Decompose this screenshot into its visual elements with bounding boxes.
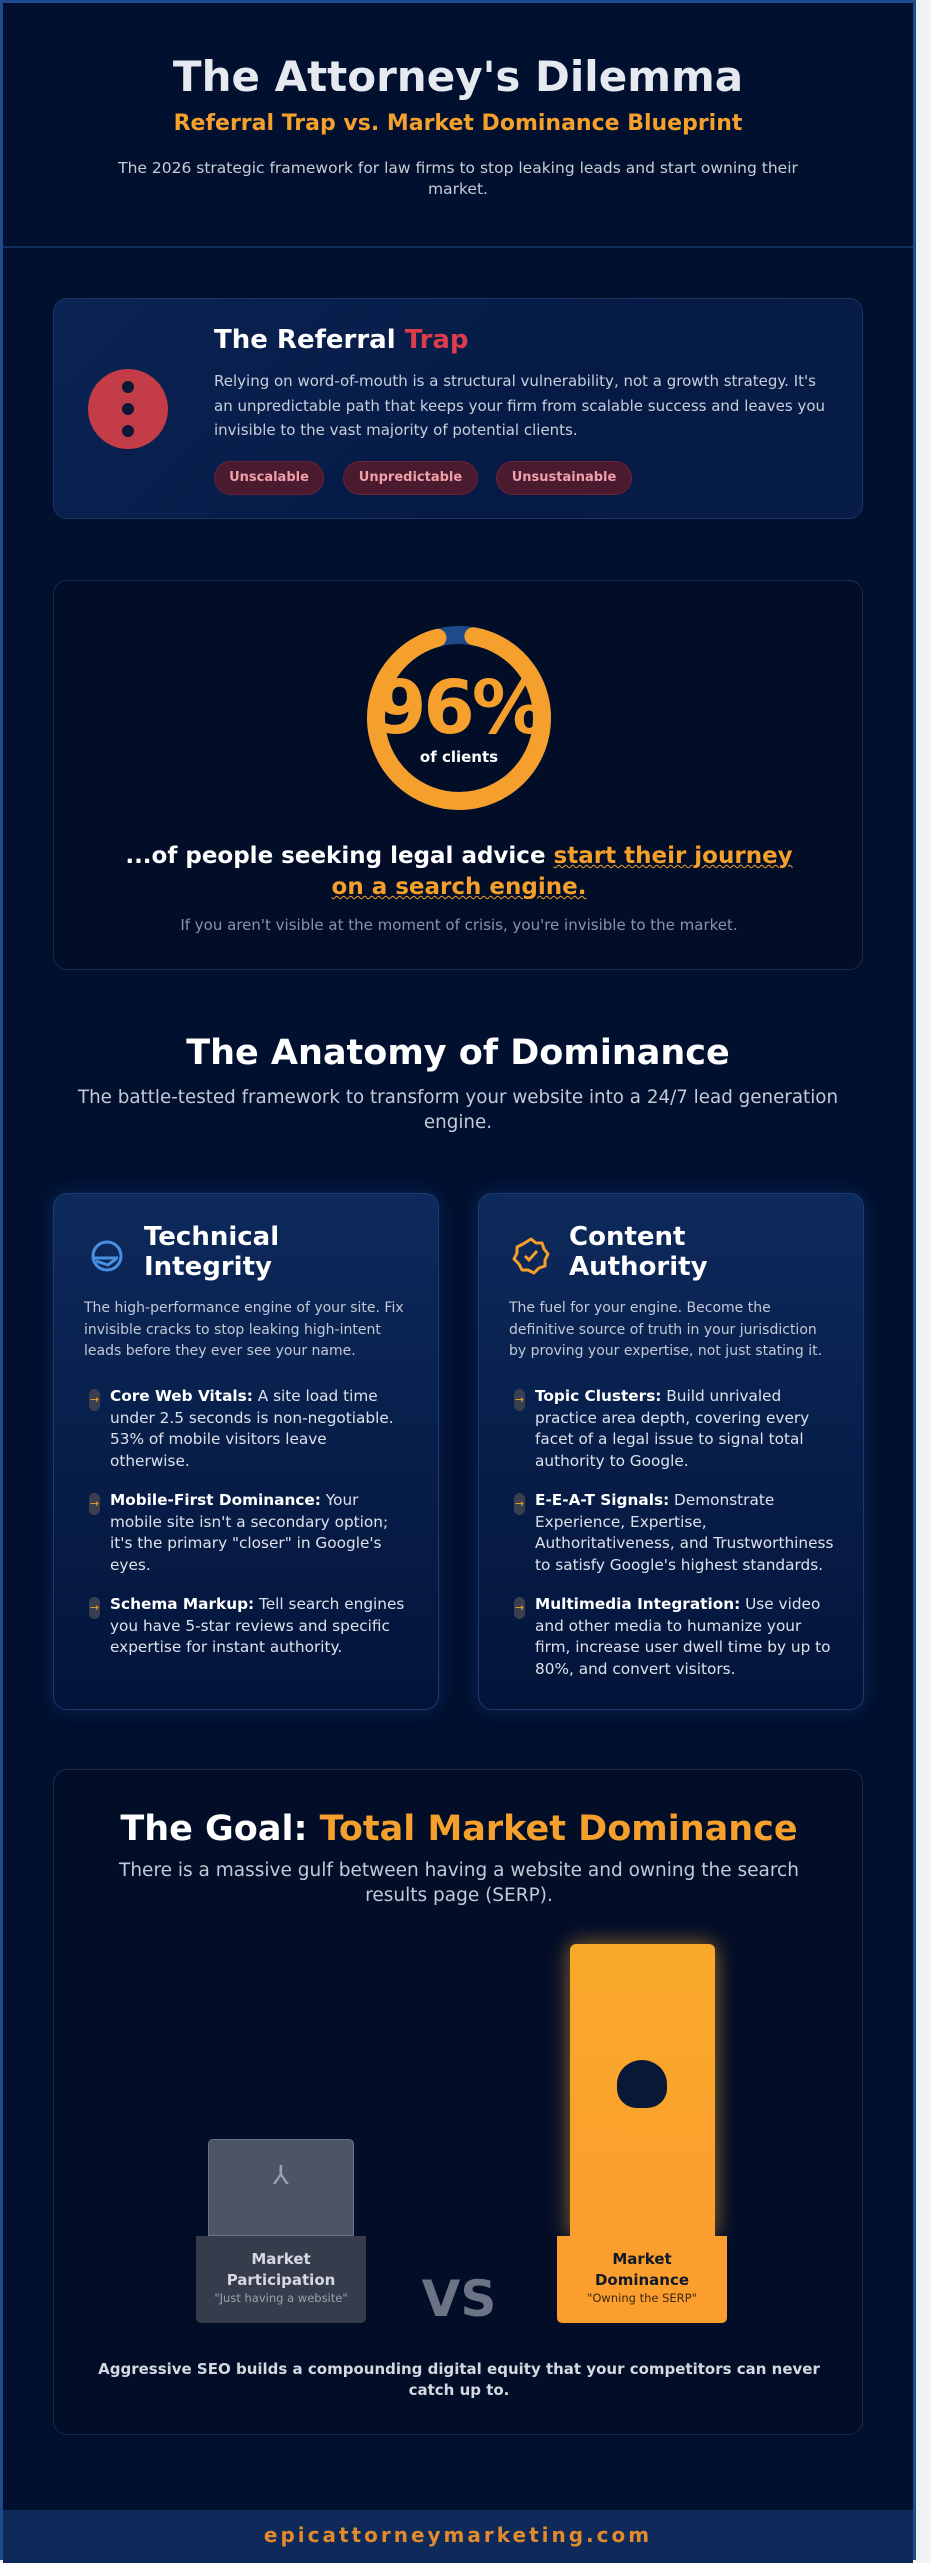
bar: market participation: Market: [251, 2250, 311, 2268]
icon: fork: ⅄: [273, 2161, 289, 2191]
description: The high-performance engine of your site. Fix invisible cracks to stop leaking high-intent leads before they ever see your name.: [84, 1300, 404, 1359]
panel: referral trap: [53, 298, 863, 519]
title: The Attorney's Dilemma: [173, 52, 743, 101]
statement: ...of people seeking legal advice start their journey on a search engine.: [125, 843, 793, 900]
panel: content authority: →: [515, 1497, 524, 1510]
bar: market participation: "Just having a website": [214, 2291, 348, 2305]
heading: The Goal: Total Market Dominance: [120, 1809, 798, 1849]
icon: badge check: [512, 1238, 550, 1274]
anatomy heading: The battle-tested framework to transform your website into a 24/7 lead generation engine.: [78, 1087, 838, 1133]
tags: Unscalable: [229, 470, 309, 485]
heading: Authority: [569, 1252, 708, 1282]
bullet: core web vitals: Core Web Vitals: A site load time under 2.5 seconds is non-negotiable. 53% of mobile visitors leave otherwise.: [110, 1387, 394, 1470]
panel: content authority: →: [515, 1601, 524, 1614]
panel: 96% stat: [53, 580, 863, 970]
panel: technical integrity: [53, 1193, 439, 1710]
anatomy heading: [78, 1033, 838, 1133]
heading: [144, 1222, 279, 1282]
bar: market dominance: Market: [612, 2250, 672, 2268]
bar: market participation: [196, 2139, 366, 2323]
description: The fuel for your engine. Become the definitive source of truth in your jurisdiction by proving your expertise, not just stating it.: [509, 1300, 822, 1359]
takeaway: Aggressive SEO builds a compounding digital equity that your competitors can never catch up to.: [98, 2360, 820, 2399]
tags: [214, 461, 632, 495]
vs label: VS: [422, 2270, 496, 2328]
subtitle: Referral Trap vs. Market Dominance Blueprint: [174, 111, 742, 136]
bar: market dominance: "Owning the SERP": [587, 2291, 697, 2305]
header: [3, 3, 913, 248]
tags: Unsustainable: [512, 470, 616, 485]
bullet: multimedia: Multimedia Integration: Use video and other media to humanize your firm, increase user dwell time by up to 80%, and convert visitors.: [535, 1595, 831, 1678]
anatomy heading: The Anatomy of Dominance: [186, 1033, 730, 1073]
footer: [3, 2510, 913, 2563]
subtext: There is a massive gulf between having a website and owning the search results page (SERP).: [119, 1860, 799, 1906]
note: If you aren't visible at the moment of crisis, you're invisible to the market.: [180, 916, 738, 934]
panel: content authority: →: [515, 1393, 524, 1406]
bullet: schema: Schema Markup: Tell search engines you have 5-star reviews and specific expertise for instant authority.: [110, 1595, 404, 1656]
bullet: EEAT: E-E-A-T Signals: Demonstrate Experience, Expertise, Authoritativeness, and Trustworthiness to satisfy Google's highest standards.: [535, 1491, 833, 1574]
donut chart: [367, 626, 551, 810]
heading: Content: [569, 1222, 685, 1252]
heading: The Referral Trap: [214, 325, 469, 355]
donut chart: 96%: [375, 665, 544, 751]
bar: market participation: Participation: [227, 2271, 335, 2289]
panel: technical integrity: →: [90, 1497, 99, 1510]
panel: content authority: [478, 1193, 864, 1710]
heading: [569, 1222, 708, 1282]
heading: Technical: [144, 1222, 279, 1252]
panel: technical integrity: →: [90, 1393, 99, 1406]
bar: market dominance: Dominance: [595, 2271, 689, 2289]
donut chart: of clients: [420, 748, 498, 766]
icon: gauge: [92, 1240, 122, 1272]
panel: goal: [53, 1769, 863, 2435]
footer: epicattorneymarketing.com: [264, 2523, 652, 2547]
intro text: The 2026 strategic framework for law firms to stop leaking leads and start owning their market.: [118, 159, 798, 198]
icon: warning dots: [88, 369, 168, 449]
bullet: topic clusters: Topic Clusters: Build unrivaled practice area depth, covering every facet of a legal issue to signal total authority to Google.: [535, 1387, 809, 1470]
bullet: mobile-first: Mobile-First Dominance: Your mobile site isn't a secondary option; it's the primary "closer" in Google's eyes.: [110, 1491, 388, 1574]
body text: Relying on word-of-mouth is a structural vulnerability, not a growth strategy. It's an unpredictable path that keeps your firm from scalable success and leaves you invisible to the vast majority of potential clients.: [214, 372, 825, 439]
icon: dark dome: [617, 2060, 667, 2108]
tags: Unpredictable: [359, 470, 462, 485]
heading: Integrity: [144, 1252, 272, 1282]
bar: market dominance: [554, 1928, 731, 2323]
panel: technical integrity: →: [90, 1601, 99, 1614]
